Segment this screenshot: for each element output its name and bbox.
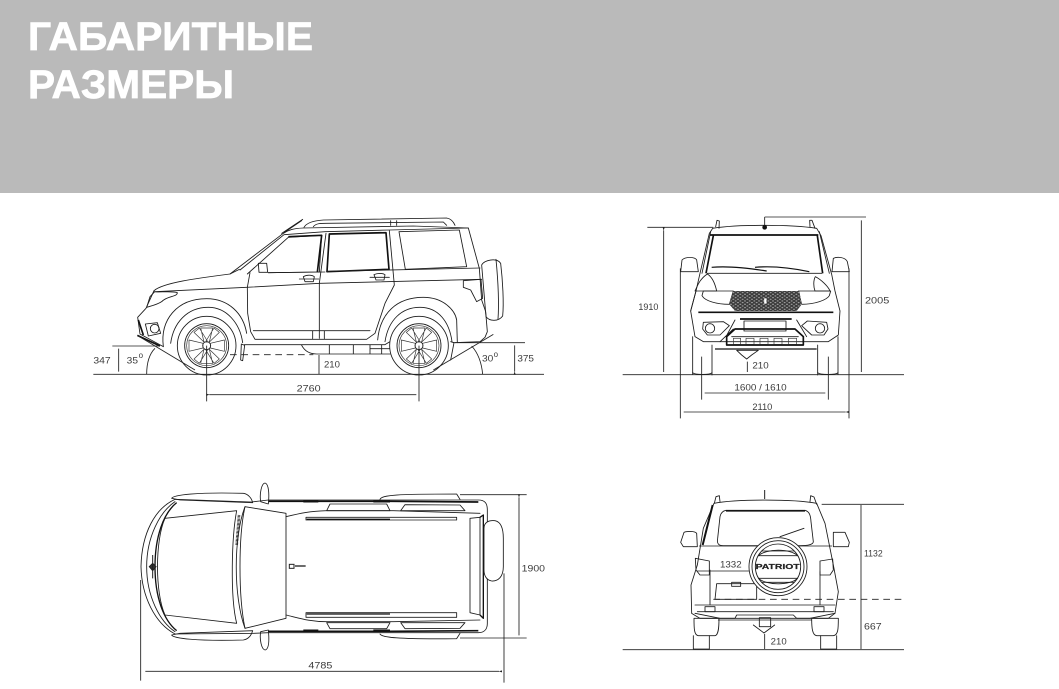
wipers xyxy=(712,267,809,272)
car top outline xyxy=(141,483,503,650)
front dimensions xyxy=(623,217,904,418)
side dimensions: 2760 xyxy=(297,384,321,394)
rear dimensions: 1132 xyxy=(864,549,883,559)
rear view drawing xyxy=(623,490,904,650)
side dimensions: 347 xyxy=(93,356,111,366)
mirrors xyxy=(681,531,849,547)
side dimensions xyxy=(93,334,544,401)
antenna xyxy=(762,225,767,230)
front dimensions: 1600 / 1610 xyxy=(734,383,787,393)
title xyxy=(28,15,313,107)
door handles xyxy=(299,273,389,282)
wheel arches xyxy=(163,299,247,347)
rear dimensions xyxy=(623,504,904,650)
mirrors xyxy=(260,483,269,650)
mirror xyxy=(258,263,268,272)
header band xyxy=(0,0,1059,193)
windscreen cowl xyxy=(236,507,245,628)
fog lamps xyxy=(703,322,729,335)
top dimensions: 1900 xyxy=(522,564,545,574)
car front xyxy=(681,220,849,375)
plate xyxy=(715,582,757,599)
wiper and antenna xyxy=(230,219,303,274)
emblem xyxy=(149,555,156,578)
side dimensions: 210 xyxy=(324,360,340,370)
headlight xyxy=(147,292,177,307)
grille xyxy=(729,291,802,311)
spare wheel emblem xyxy=(749,538,807,596)
side dimensions: o xyxy=(139,351,144,360)
top dimensions xyxy=(141,495,545,683)
rear dimensions: 210 xyxy=(771,637,787,647)
car body side xyxy=(137,218,503,361)
rear dimensions: 1332 xyxy=(720,560,742,570)
tow hitch xyxy=(753,618,775,633)
side dimensions: 30 xyxy=(482,354,493,364)
tail lamps xyxy=(695,558,833,575)
spare wheel emblem: PATRIOT xyxy=(756,564,801,571)
car rear xyxy=(681,490,849,649)
rear window xyxy=(717,510,813,546)
hood xyxy=(157,511,237,623)
side view drawing xyxy=(93,218,544,401)
roof rail xyxy=(304,218,455,227)
bumper xyxy=(698,312,833,319)
door glass strips xyxy=(327,504,465,629)
guard xyxy=(727,329,803,345)
spare wheel xyxy=(484,521,503,581)
axle and diff xyxy=(715,347,817,351)
rear door xyxy=(470,517,480,615)
roof rails xyxy=(306,517,457,617)
lower bumper xyxy=(695,613,835,620)
title: РАЗМЕРЫ xyxy=(28,63,234,107)
rear lamp xyxy=(463,279,483,302)
front view drawing xyxy=(623,217,904,418)
spare wheel xyxy=(482,260,503,320)
top dimensions: 4785 xyxy=(308,661,332,671)
front dimensions: 2110 xyxy=(752,402,772,412)
rear wheel xyxy=(390,316,448,375)
front dimensions: 210 xyxy=(752,361,769,371)
front dimensions: 1910 xyxy=(638,302,658,312)
title: ГАБАРИТНЫЕ xyxy=(28,15,313,59)
tyres xyxy=(693,337,838,375)
sill and step xyxy=(244,342,390,354)
side dimensions: o xyxy=(494,350,499,359)
side dimensions: 375 xyxy=(517,354,534,364)
mirrors xyxy=(681,257,849,272)
front dimensions: 2005 xyxy=(865,296,889,306)
top view drawing xyxy=(141,483,545,683)
rear dimensions: 667 xyxy=(864,621,882,631)
roof xyxy=(240,507,286,628)
headlamps xyxy=(695,274,830,291)
front wheel xyxy=(177,316,236,375)
antenna xyxy=(295,564,306,568)
fog lamp xyxy=(145,323,161,336)
side dimensions: 35 xyxy=(127,356,138,366)
